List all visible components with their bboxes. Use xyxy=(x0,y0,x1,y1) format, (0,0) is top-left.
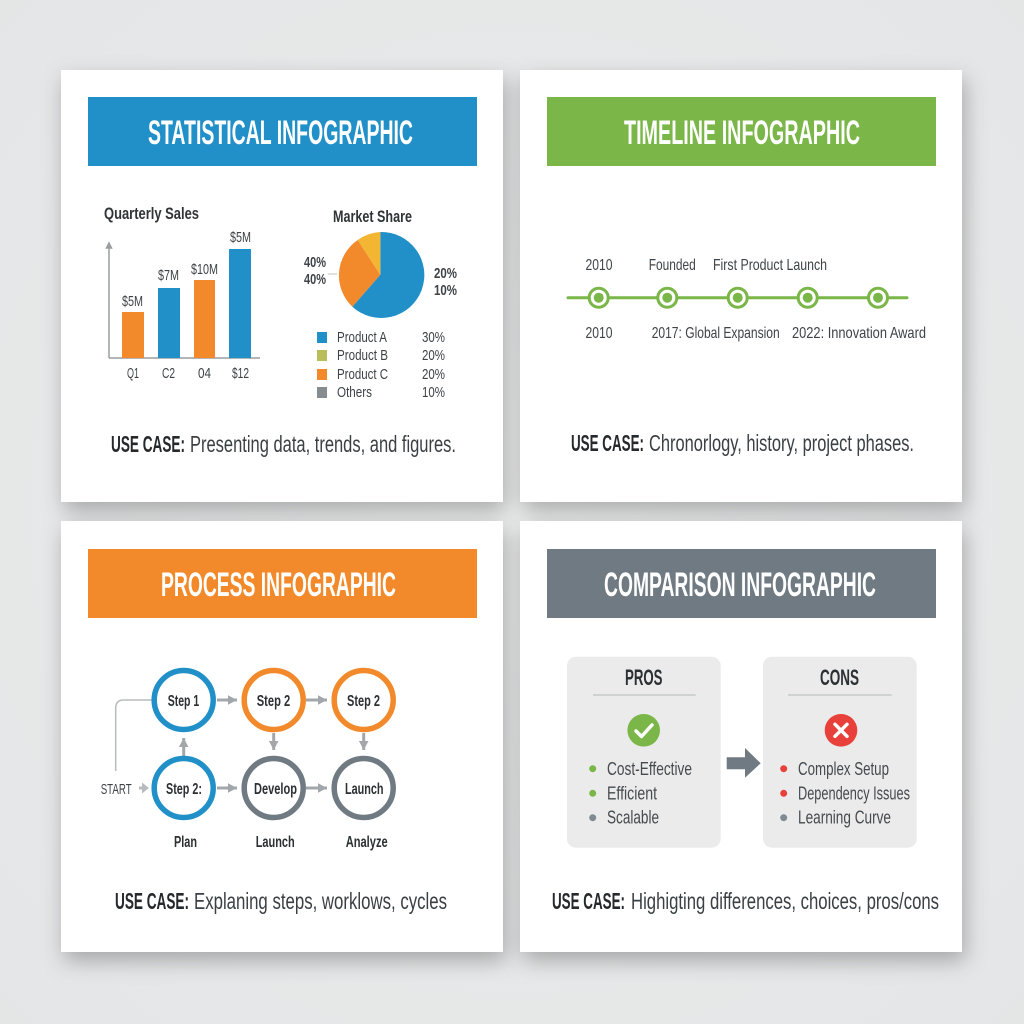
legend: market share: 20% xyxy=(422,347,445,364)
heading: statistical infographic xyxy=(88,97,477,166)
pie chart: market share: 10% xyxy=(434,282,457,299)
pie chart: market share: 40% xyxy=(304,271,326,288)
pros box: Scalable xyxy=(607,808,659,828)
use case: statistical: Presenting data, trends, and figures. xyxy=(190,431,456,457)
bar chart: quarterly sales: $12 xyxy=(232,365,249,382)
legend: market share: Product A xyxy=(337,329,387,346)
use case: statistical xyxy=(111,431,456,457)
timeline chart: 2010 xyxy=(586,257,613,274)
legend: market share xyxy=(317,329,445,401)
use case: comparison xyxy=(552,888,939,914)
arrows xyxy=(184,700,364,788)
panel: comparison infographic xyxy=(520,521,962,952)
flow diagram: Plan xyxy=(174,834,197,851)
timeline chart: 2022: Innovation Award xyxy=(792,325,926,342)
legend: market share: Others xyxy=(337,384,372,401)
timeline chart: Founded xyxy=(649,257,696,274)
cons box: CONS xyxy=(820,665,859,690)
flow diagram: Step 2: xyxy=(166,781,202,798)
bar chart: quarterly sales: Quarterly Sales xyxy=(104,204,199,223)
use case: timeline: Chronorlogy, history, project phases. xyxy=(649,430,914,456)
bar chart: quarterly sales: Q1 xyxy=(127,365,139,382)
bar chart: quarterly sales: $7M xyxy=(158,267,179,284)
panel: timeline infographic xyxy=(520,70,962,502)
timeline chart: 2017: Global Expansion xyxy=(652,325,780,342)
timeline chart: 2010 xyxy=(586,325,613,342)
flow diagram: Develop xyxy=(254,781,297,798)
legend: market share: 20% xyxy=(422,366,445,383)
flow diagram: START xyxy=(101,781,132,798)
pie chart: market share: 40% xyxy=(304,254,326,271)
use case: comparison: USE CASE: xyxy=(552,888,625,914)
flow diagram: Analyze xyxy=(346,834,388,851)
bar chart: quarterly sales: 04 xyxy=(198,365,211,382)
bar chart: quarterly sales xyxy=(104,204,260,382)
pie chart: market share xyxy=(304,207,457,318)
panel: process infographic xyxy=(61,521,503,952)
cons box: Dependency Issues xyxy=(798,784,910,804)
use case: timeline: USE CASE: xyxy=(571,430,644,456)
legend: market share: Product B xyxy=(337,347,388,364)
panel: statistical infographic xyxy=(61,70,503,502)
pros box: Efficient xyxy=(607,784,657,804)
use case: statistical: USE CASE: xyxy=(111,431,185,457)
heading: timeline infographic: TIMELINE INFOGRAPHIC xyxy=(624,114,860,152)
legend: market share: 10% xyxy=(422,384,445,401)
bar chart: quarterly sales: $5M xyxy=(230,229,251,246)
cons box xyxy=(763,657,917,848)
flow diagram: Step 2 xyxy=(347,693,380,710)
icon: check xyxy=(627,714,660,747)
flow diagram xyxy=(101,670,393,851)
bar chart: quarterly sales: $5M xyxy=(122,293,143,310)
pros box: Cost-Effective xyxy=(607,759,692,779)
heading: comparison infographic xyxy=(547,549,936,618)
bar chart: quarterly sales: C2 xyxy=(162,365,175,382)
flow diagram: Launch xyxy=(256,834,295,851)
use case: process xyxy=(115,888,447,914)
heading: timeline infographic xyxy=(547,97,936,166)
flow diagram: Step 1 xyxy=(168,693,199,710)
use case: process: USE CASE: xyxy=(115,888,189,914)
pros box xyxy=(567,657,721,848)
pie chart: market share: Market Share xyxy=(333,207,412,226)
use case: process: Explaning steps, worklows, cycles xyxy=(194,888,447,914)
flow diagram: Launch xyxy=(345,781,384,798)
cons box: Learning Curve xyxy=(798,808,891,828)
heading: statistical infographic: STATISTICAL INFOGRAPHIC xyxy=(148,114,413,152)
pie chart: market share: 20% xyxy=(434,265,457,282)
timeline chart xyxy=(568,257,926,342)
icon: cross xyxy=(825,714,857,747)
arrow: pros to cons xyxy=(727,748,761,778)
use case: timeline xyxy=(571,430,914,456)
bar chart: quarterly sales: $10M xyxy=(191,261,218,278)
pros box: PROS xyxy=(625,665,662,690)
step circles xyxy=(154,670,393,818)
legend: market share: 30% xyxy=(422,329,445,346)
timeline chart: First Product Launch xyxy=(713,257,827,274)
heading: process infographic xyxy=(88,549,477,618)
legend: market share: Product C xyxy=(337,366,388,383)
flow diagram: Step 2 xyxy=(257,693,290,710)
cons box: Complex Setup xyxy=(798,759,889,779)
heading: process infographic: PROCESS INFOGRAPHIC xyxy=(161,566,396,604)
